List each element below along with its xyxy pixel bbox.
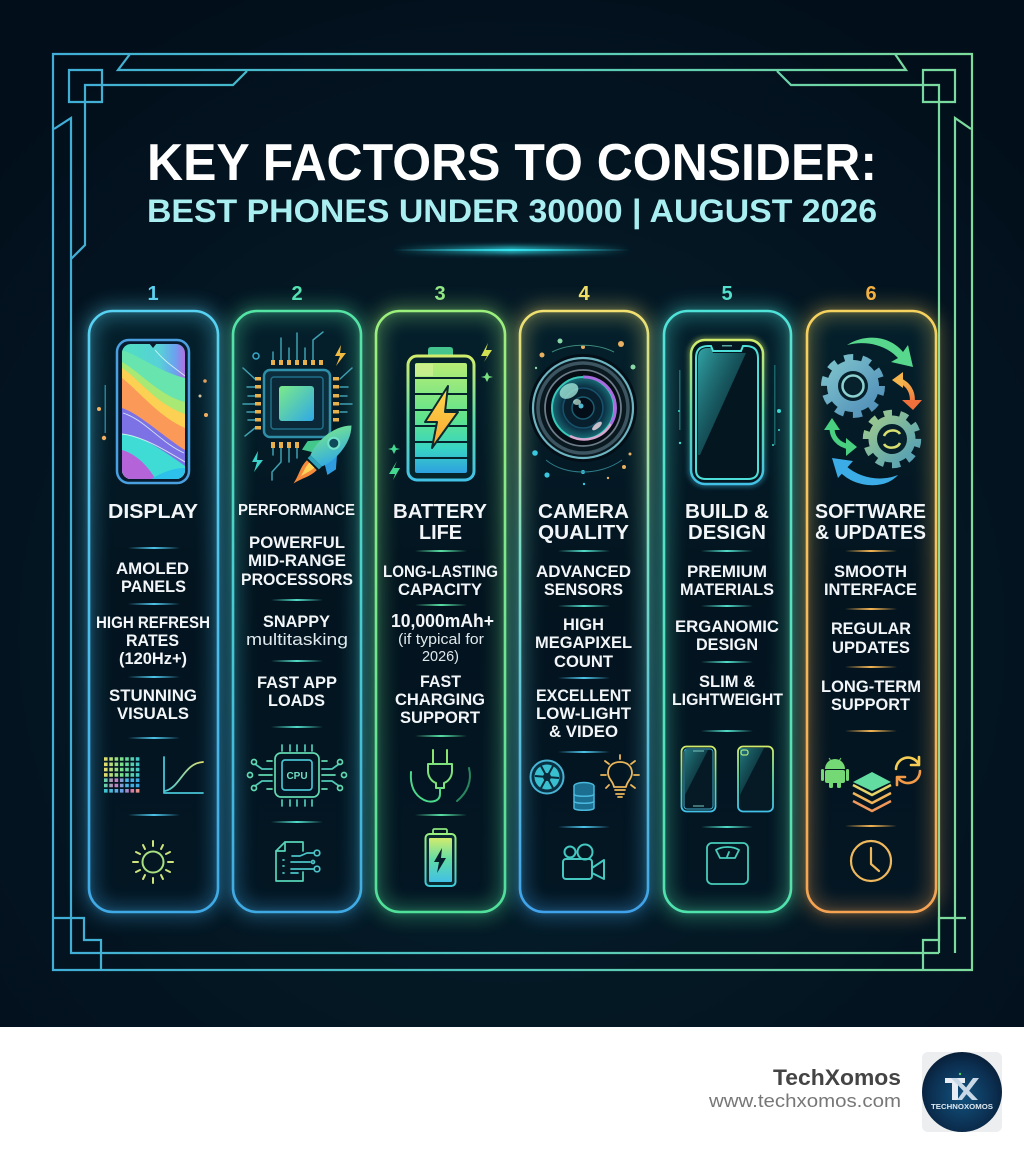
- panel: camera quality: [520, 283, 648, 912]
- point: fast charging support: FAST: [420, 672, 462, 691]
- number 4: 4: [578, 283, 590, 305]
- heading: battery life: BATTERY: [393, 501, 488, 523]
- point: fast app loads: FAST APP: [257, 673, 337, 692]
- point: battery capacity: 10,000mAh+: [391, 611, 494, 631]
- point: ergonomic design: DESIGN: [696, 635, 758, 654]
- number 3: 3: [434, 283, 446, 305]
- point: high megapixel count: [535, 615, 632, 671]
- point: premium materials: [680, 562, 774, 599]
- point: battery capacity: [391, 611, 494, 665]
- heading: software and updates: SOFTWARE: [815, 501, 926, 523]
- icon: sensor stack: [574, 782, 594, 810]
- number 1: 1: [147, 283, 159, 305]
- point: advanced sensors: [536, 562, 631, 599]
- point: powerful processors: POWERFUL: [249, 533, 345, 552]
- panel: battery life: [376, 283, 505, 912]
- point: fast app loads: LOADS: [268, 691, 325, 710]
- number 2: 2: [291, 283, 303, 305]
- icon: phone front: [682, 746, 716, 812]
- brand name: TechXomos: [773, 1065, 901, 1090]
- point: high refresh rates: RATES: [126, 631, 179, 650]
- sparkle dots: [97, 379, 208, 440]
- icon: gears and arrows: [824, 338, 922, 485]
- heading: battery life: LIFE: [419, 522, 462, 544]
- icon: sun brightness: [133, 841, 173, 883]
- point: stunning visuals: [109, 686, 197, 723]
- point: low-light and video: [536, 686, 632, 741]
- point: amoled panels: PANELS: [121, 577, 186, 596]
- icon: small battery: [426, 829, 456, 886]
- point: advanced sensors: ADVANCED: [536, 562, 631, 581]
- point: battery capacity: (if typical for: [398, 631, 484, 648]
- icon: cpu: [248, 745, 346, 806]
- title divider: [393, 247, 630, 253]
- icon: processor with rocket: [243, 332, 366, 498]
- point: high megapixel count: MEGAPIXEL: [535, 633, 632, 652]
- point: fast app loads: [257, 673, 337, 710]
- icon: clock: [851, 841, 891, 881]
- title: KEY FACTORS TO CONSIDER:: [147, 134, 877, 192]
- point: long-lasting capacity: LONG-LASTING: [383, 562, 498, 581]
- logo badge: TECHNOXOMOS: [931, 1104, 993, 1111]
- point: slim and lightweight: LIGHTWEIGHT: [672, 690, 784, 709]
- point: premium materials: MATERIALS: [680, 580, 774, 599]
- heading: battery life: [393, 501, 488, 544]
- icon: video camera: [563, 844, 604, 879]
- point: long-term support: SUPPORT: [831, 695, 911, 714]
- point: long-lasting capacity: CAPACITY: [398, 580, 483, 599]
- point: battery capacity: 2026): [422, 648, 459, 665]
- heading: camera quality: [538, 501, 630, 544]
- point: ergonomic design: [675, 617, 779, 654]
- point: high refresh rates: [96, 613, 210, 668]
- icon: response curve: [164, 757, 203, 793]
- point: snappy multitasking: SNAPPY: [263, 612, 331, 631]
- icon: pixel grid: [104, 759, 141, 791]
- point: fast charging support: SUPPORT: [400, 708, 481, 727]
- point: powerful processors: MID-RANGE: [248, 551, 346, 570]
- point: regular updates: [831, 619, 911, 657]
- point: long-term support: [821, 677, 921, 714]
- heading: performance: PERFORMANCE: [238, 502, 355, 519]
- icon: aperture: [530, 760, 564, 794]
- number 6: 6: [865, 283, 877, 305]
- icon: document circuit: [276, 842, 320, 881]
- point: low-light and video: LOW-LIGHT: [536, 704, 632, 723]
- point: smooth interface: [824, 562, 917, 599]
- point: high megapixel count: COUNT: [554, 652, 614, 671]
- icon: cpu: CPU: [286, 771, 308, 782]
- point: premium materials: PREMIUM: [687, 562, 767, 581]
- point: powerful processors: PROCESSORS: [241, 570, 353, 589]
- point: smooth interface: SMOOTH: [834, 562, 907, 581]
- point: high refresh rates: HIGH REFRESH: [96, 613, 210, 632]
- icon: charging plug: [411, 750, 470, 802]
- icon: sync arrows: [896, 757, 920, 785]
- subtitle: BEST PHONES UNDER 30000 | AUGUST 2026: [147, 193, 877, 229]
- decorative tech frame: [53, 54, 972, 970]
- panel: build and design: [664, 283, 791, 912]
- panel: display: [89, 283, 218, 912]
- point: advanced sensors: SENSORS: [544, 580, 623, 599]
- heading: build and design: [685, 501, 769, 544]
- point: low-light and video: & VIDEO: [549, 722, 618, 741]
- heading: build and design: BUILD &: [685, 501, 769, 523]
- icon: camera lens: [529, 338, 637, 485]
- point: stunning visuals: STUNNING: [109, 686, 197, 705]
- point: slim and lightweight: [672, 672, 784, 709]
- point: fast charging support: [395, 672, 485, 727]
- point: amoled panels: AMOLED: [116, 559, 189, 578]
- point: amoled panels: [116, 559, 189, 596]
- point: long-term support: LONG-TERM: [821, 677, 921, 696]
- point: regular updates: UPDATES: [832, 638, 910, 657]
- icon: light bulb: [601, 755, 639, 797]
- point: high megapixel count: HIGH: [563, 615, 604, 634]
- website url: www.techxomos.com: [708, 1091, 901, 1111]
- footer strip: [0, 1027, 1024, 1154]
- point: slim and lightweight: SLIM &: [699, 672, 755, 691]
- point: stunning visuals: VISUALS: [117, 704, 189, 723]
- point: low-light and video: EXCELLENT: [536, 686, 632, 705]
- panel: performance: [233, 283, 366, 912]
- point: high refresh rates: (120Hz+): [119, 649, 187, 668]
- panel: software and updates: [807, 283, 936, 912]
- icon: rainbow phone: [117, 340, 189, 483]
- heading: build and design: DESIGN: [688, 522, 766, 544]
- icon: weighing scale: [707, 843, 748, 884]
- heading: software and updates: & UPDATES: [815, 522, 926, 544]
- heading: software and updates: [815, 501, 926, 544]
- icon: android: [821, 758, 849, 788]
- point: ergonomic design: ERGANOMIC: [675, 617, 779, 636]
- point: regular updates: REGULAR: [831, 619, 911, 638]
- number 5: 5: [721, 283, 733, 305]
- icon: phone outline: [678, 340, 781, 484]
- heading: camera quality: QUALITY: [538, 522, 630, 544]
- heading: camera quality: CAMERA: [538, 501, 629, 523]
- icon: phone back: [738, 746, 773, 812]
- icon: battery with bolt: [388, 343, 493, 480]
- point: fast charging support: CHARGING: [395, 690, 485, 709]
- heading: display: DISPLAY: [108, 501, 199, 523]
- point: snappy multitasking: [246, 612, 348, 649]
- point: powerful processors: [241, 533, 353, 589]
- logo badge: [922, 1052, 1002, 1132]
- point: smooth interface: INTERFACE: [824, 580, 917, 599]
- point: long-lasting capacity: [383, 562, 498, 599]
- point: snappy multitasking: multitasking: [246, 630, 348, 649]
- icon: layer stack: [853, 772, 891, 811]
